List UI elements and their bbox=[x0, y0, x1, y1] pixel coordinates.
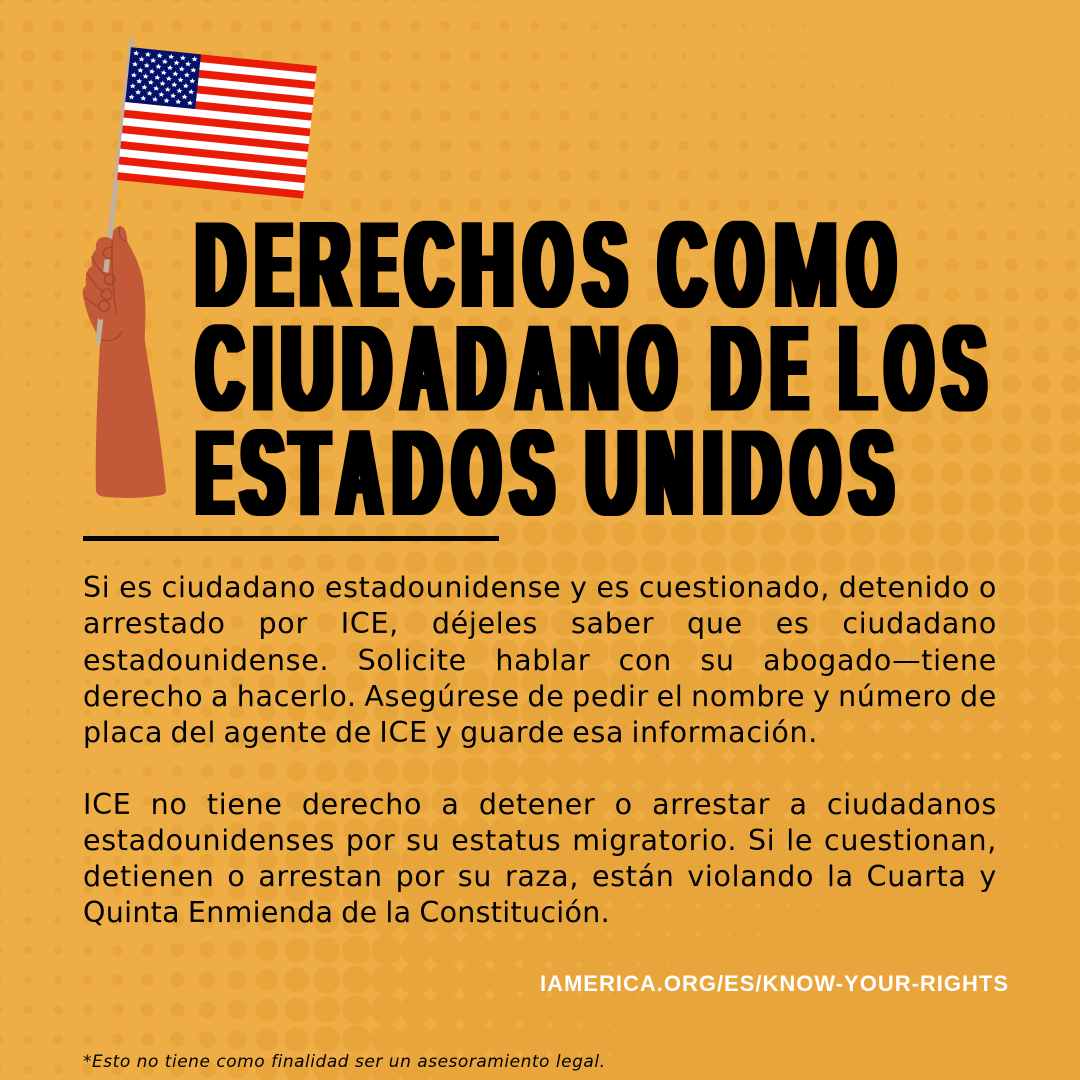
footnote: legal disclaimer: *Esto no tiene como finalidad ser un asesoramiento legal. bbox=[83, 1052, 605, 1072]
title: A bbox=[517, 300, 560, 436]
title: O bbox=[792, 404, 839, 540]
title: S bbox=[584, 196, 626, 332]
title: D bbox=[196, 196, 245, 332]
title: M bbox=[774, 196, 838, 332]
icon: American flag bbox=[117, 47, 317, 199]
title: E bbox=[362, 196, 396, 332]
icon: raised arm holding flag pole bbox=[83, 40, 166, 498]
text block: first paragraph: placa del agente de ICE y guarde esa información. bbox=[83, 716, 818, 749]
title: D bbox=[457, 300, 504, 436]
text block: first paragraph: Si es ciudadano estadounidense y es cuestionado, detenido o bbox=[83, 571, 997, 604]
title: A bbox=[338, 404, 381, 540]
title: N bbox=[571, 300, 618, 436]
title: U bbox=[586, 404, 637, 540]
title: O bbox=[848, 196, 895, 332]
text block: first paragraph bbox=[83, 571, 997, 749]
text block: second paragraph: ICE no tiene derecho a detener o arrestar a ciudadanos bbox=[83, 788, 997, 821]
title: U bbox=[282, 300, 333, 436]
title: D bbox=[711, 300, 759, 436]
title: O bbox=[886, 300, 932, 436]
title: D bbox=[732, 404, 780, 540]
title: S bbox=[512, 404, 553, 540]
text block: first paragraph: derecho a hacerlo. Asegúrese de pedir el nombre y número de bbox=[83, 680, 997, 713]
title: I bbox=[254, 300, 272, 436]
title: E bbox=[257, 196, 291, 332]
title: D bbox=[393, 404, 441, 540]
title: C bbox=[406, 196, 452, 332]
text block: first paragraph: arrestado por ICE, déjeles saber que es ciudadano bbox=[83, 607, 997, 640]
title: E bbox=[197, 404, 232, 540]
text block: second paragraph: estadounidenses por su estatus migratorio. Si le cuestionan, bbox=[83, 824, 997, 857]
title bbox=[196, 196, 985, 540]
title: O bbox=[453, 404, 500, 540]
title: E bbox=[772, 300, 806, 436]
title: I bbox=[704, 404, 722, 540]
divider rule under title bbox=[83, 536, 499, 541]
title: T bbox=[291, 404, 328, 540]
title: L bbox=[840, 300, 875, 436]
title: A bbox=[402, 300, 445, 436]
title: C bbox=[197, 300, 243, 436]
title: N bbox=[647, 404, 692, 540]
title: S bbox=[242, 404, 284, 540]
title: H bbox=[462, 196, 513, 332]
text block: first paragraph: estadounidense. Solicite hablar con su abogado—tiene bbox=[83, 644, 997, 677]
text block: second paragraph: Quinta Enmienda de la Constitución. bbox=[83, 896, 610, 929]
title: S bbox=[944, 300, 985, 436]
title: C bbox=[659, 196, 705, 332]
title: O bbox=[717, 196, 762, 332]
text block: second paragraph: detienen o arrestan por su raza, están violando la Cuarta y bbox=[83, 860, 997, 893]
title: R bbox=[300, 196, 349, 332]
text block: second paragraph bbox=[83, 788, 997, 929]
title: O bbox=[525, 196, 571, 332]
title: O bbox=[629, 300, 676, 436]
link: website URL: IAMERICA.ORG/ES/KNOW-YOUR-RIGHTS bbox=[540, 971, 1008, 996]
title: S bbox=[851, 404, 892, 540]
title: D bbox=[343, 300, 390, 436]
